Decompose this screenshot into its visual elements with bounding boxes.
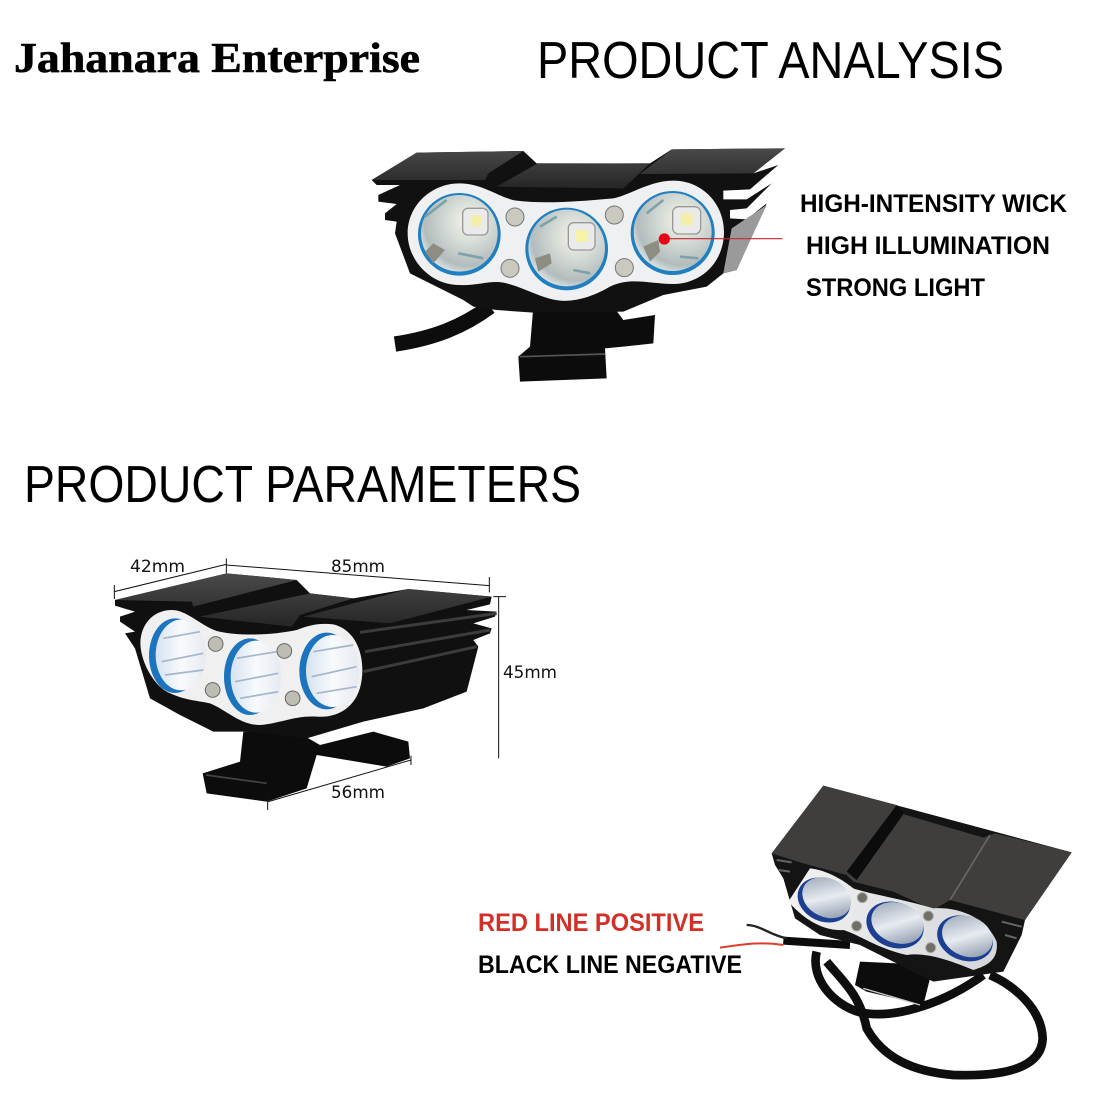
groove — [847, 805, 904, 880]
dimension labels: 45mm — [503, 663, 557, 683]
heading: product analysis: PRODUCT ANALYSIS — [537, 32, 1004, 90]
lens centre — [525, 208, 608, 290]
lens left — [149, 618, 206, 693]
wiring legend: RED LINE POSITIVE — [478, 909, 704, 937]
body — [115, 573, 497, 738]
silver face plate — [408, 181, 724, 301]
cooling fins — [360, 613, 497, 672]
cable loops — [816, 952, 1043, 1075]
lens right — [299, 633, 359, 709]
lens centre — [860, 894, 930, 956]
dimension labels: 56mm — [331, 783, 385, 803]
screws — [205, 637, 300, 706]
body — [372, 148, 785, 313]
wiring view: headlight from above with cables — [720, 786, 1072, 1075]
brand title: Jahanara Enterprise — [14, 36, 420, 82]
screws — [852, 893, 936, 953]
dimension labels: 85mm — [331, 557, 385, 577]
mount bracket — [203, 732, 410, 802]
heading: product parameters: PRODUCT PARAMETERS — [24, 456, 581, 514]
lens right — [631, 191, 715, 275]
mount — [855, 962, 933, 1005]
dimension labels: 42mm — [130, 557, 185, 577]
callout labels — [800, 190, 1067, 302]
callout labels: STRONG LIGHT — [806, 274, 985, 302]
lens left — [418, 193, 501, 276]
screws — [501, 206, 633, 277]
dimension labels — [130, 557, 557, 803]
dimension diagram: headlight with measurements — [114, 558, 506, 810]
cable — [395, 307, 490, 344]
mount bracket — [518, 307, 655, 382]
top face — [772, 786, 1072, 920]
top face — [372, 148, 785, 188]
product photo: front view of headlight — [372, 148, 785, 382]
wiring legend — [478, 909, 742, 979]
silver face plate — [140, 610, 362, 725]
wire ends — [720, 925, 850, 948]
dimension lines — [114, 558, 506, 810]
silver face plate — [788, 868, 997, 970]
lens left — [790, 869, 858, 931]
top face — [115, 573, 492, 627]
wiring legend: BLACK LINE NEGATIVE — [478, 951, 742, 979]
lens centre — [224, 638, 281, 715]
callout pointer — [659, 233, 782, 245]
callout labels: HIGH ILLUMINATION — [806, 232, 1050, 260]
lens right — [930, 907, 1000, 969]
cooling fins — [777, 860, 1022, 938]
body — [772, 786, 1072, 982]
callout labels: HIGH-INTENSITY WICK — [800, 190, 1067, 218]
